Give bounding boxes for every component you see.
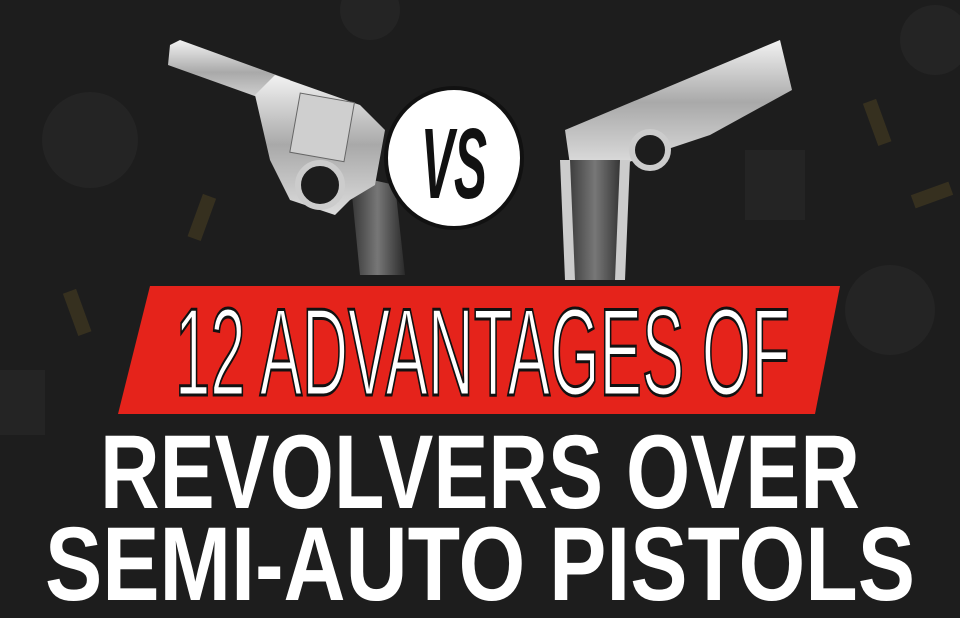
red banner: [118, 286, 840, 414]
icon: pistol: [560, 40, 792, 280]
icon: VS circle: [384, 86, 524, 230]
icon: revolver: [168, 40, 405, 275]
title: [45, 420, 915, 618]
